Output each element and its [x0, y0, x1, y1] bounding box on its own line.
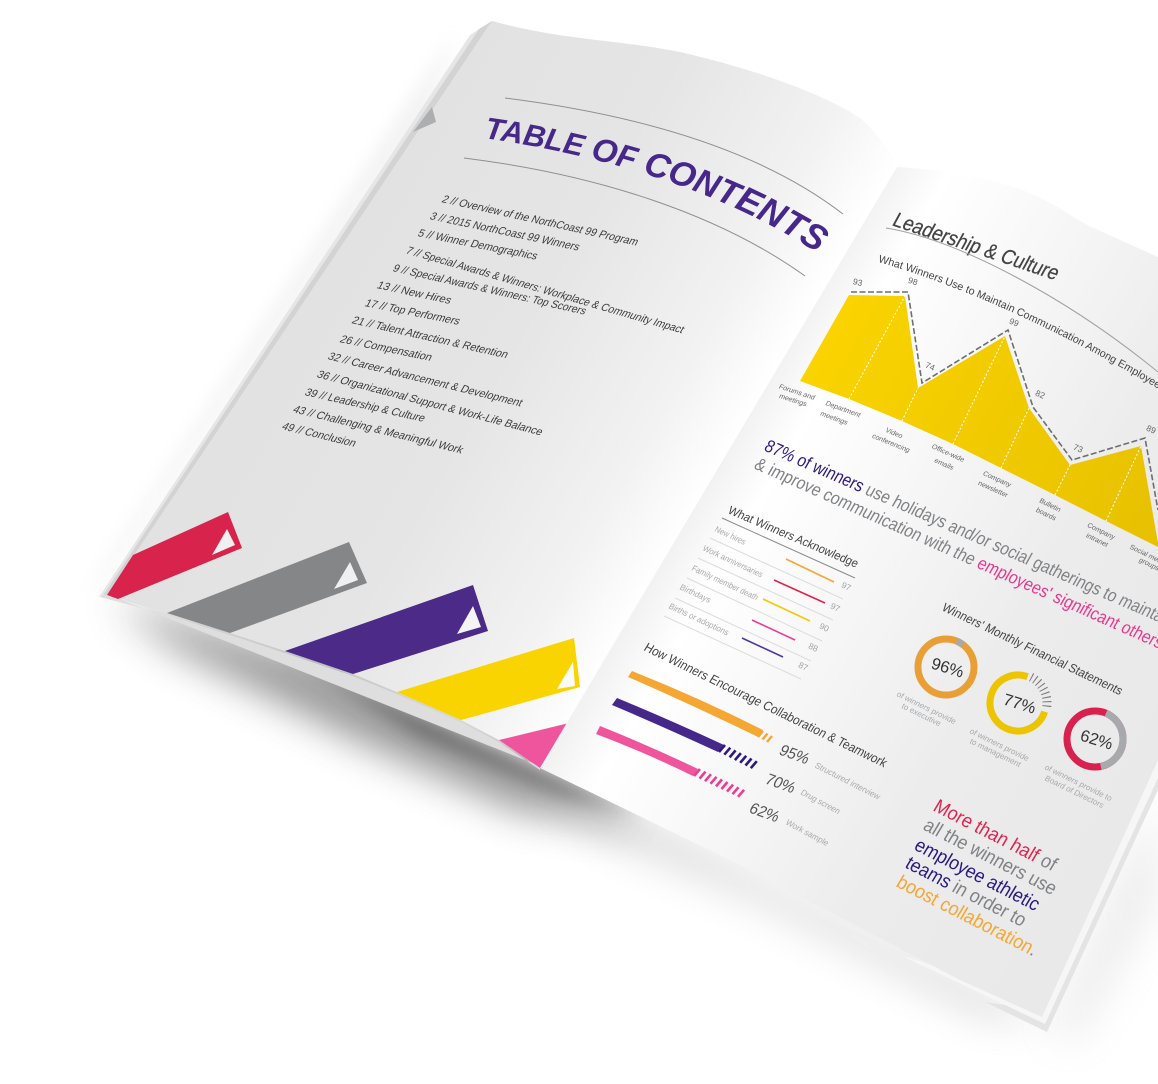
left page surface: [107, 21, 900, 768]
callout: employee athletic teams: [892, 795, 1062, 961]
axis labels: [777, 384, 1158, 573]
data values: [852, 275, 1158, 455]
title rule top: [505, 98, 843, 214]
donut: 96 percent: of winners provide: [895, 690, 958, 726]
text block: contents list: 32 // Career Advancement & Development: [325, 351, 526, 409]
values: 97: [840, 580, 853, 593]
text block: contents list: 9 // Special Awards & Winners: Top Scorers: [391, 263, 589, 317]
stripe: yellow: [397, 638, 580, 720]
row labels: Births or adoptions: [667, 601, 731, 637]
data values: 82: [1034, 388, 1047, 401]
stripe: grey: [167, 542, 367, 633]
bar labels: [784, 760, 883, 848]
data values: 73: [1072, 442, 1085, 455]
text block: contents list: 17 // Top Performers: [363, 298, 463, 328]
subheading: Winners' Monthly Financial Statements: [939, 601, 1125, 698]
axis labels: conferencing: [870, 433, 911, 454]
data values: 89: [1145, 423, 1158, 436]
white dotted dividers: [849, 296, 1141, 521]
text block: contents list: 13 // New Hires: [375, 280, 454, 307]
right page surface: [540, 167, 1158, 1017]
data values: 93: [852, 276, 864, 288]
area chart: [777, 275, 1158, 573]
data values: 74: [924, 360, 937, 373]
page edges: [900, 750, 1158, 1032]
stripe: purple: [285, 585, 488, 674]
percentages: 95%: [776, 742, 813, 768]
heading rule: [886, 228, 1158, 372]
title rule bottom: [464, 158, 805, 276]
row labels: Work anniversaries: [701, 543, 765, 579]
values: 87: [797, 660, 810, 673]
donut: 96 percent: [895, 630, 983, 728]
text block: contents list: 7 // Special Awards & Winners: Workplace & Community Impact: [403, 245, 687, 336]
axis labels: Video: [884, 427, 904, 440]
axis labels: Department: [824, 400, 862, 419]
text block: contents list: 26 // Compensation: [338, 334, 434, 364]
panel: winners' monthly financial statements: [895, 601, 1132, 810]
bar labels: Structured interview: [813, 760, 883, 802]
bar: drug screen: [612, 698, 757, 768]
values: [797, 580, 853, 673]
panel: what winners acknowledge: [664, 503, 861, 679]
bar: work sample: [596, 726, 744, 797]
values: 97: [829, 601, 842, 614]
text block: contents list: 49 // Conclusion: [279, 421, 358, 449]
donut: 96 percent: to executive: [900, 702, 943, 728]
callout: employee athletic teams: all the winners use: [919, 814, 1061, 900]
text block: contents list: 3 // 2015 NorthCoast 99 Winners: [428, 211, 582, 253]
subheading: How Winners Encourage Collaboration & Teamwork: [641, 640, 891, 770]
stripe: pink: [499, 723, 569, 768]
percentages: 70%: [762, 771, 799, 797]
axis labels: meetings: [819, 411, 849, 427]
bar labels: Work sample: [784, 817, 831, 848]
callout: employee athletic teams: More than half of: [929, 795, 1062, 876]
axis labels: intranet: [1084, 533, 1109, 549]
text block: contents list: 2 // Overview of the NorthCoast 99 Program: [440, 194, 641, 248]
donut: 62 percent: of winners provide to: [1043, 763, 1114, 803]
values: 90: [818, 621, 831, 634]
text block: contents list: 21 // Talent Attraction & Retention: [350, 315, 510, 361]
donut: 96 percent: 96%: [929, 655, 966, 682]
axis labels: Company: [981, 471, 1013, 489]
dashed line: [851, 292, 1158, 510]
stripe: red: [107, 512, 242, 599]
text block: contents list: 36 // Organizational Support & Work-Life Balance: [314, 369, 545, 438]
panel: left page (table of contents): [99, 21, 862, 770]
donut: 77 percent: [968, 664, 1057, 769]
percentages: [746, 742, 813, 826]
axis labels: newsletter: [976, 480, 1010, 499]
heading: leadership and culture: Leadership & Culture: [889, 209, 1064, 285]
bar: structured interview: [628, 671, 772, 742]
text block: contents list: 5 // Winner Demographics: [416, 228, 540, 262]
row dividers: [664, 538, 843, 679]
panel: right page (leadership and culture): [540, 167, 1158, 1032]
data values: 99: [1008, 316, 1021, 329]
values: 88: [807, 641, 820, 654]
row labels: [667, 524, 765, 637]
donut: 62 percent: [1043, 702, 1132, 810]
donut: 62 percent: Board of Directors: [1043, 774, 1106, 810]
text block: contents list: [279, 194, 687, 456]
percentages: 62%: [746, 800, 783, 826]
text block: contents list: 43 // Challenging & Meaningful Work: [290, 404, 466, 456]
page stack edges: [99, 21, 540, 770]
panel: how winners encourage collaboration: [596, 640, 891, 848]
donut: 77 percent: of winners provide: [968, 727, 1031, 763]
axis labels: Bulletin: [1038, 498, 1062, 514]
bar labels: Drug screen: [799, 787, 843, 816]
axis labels: boards: [1034, 507, 1058, 523]
axis labels: Company: [1086, 522, 1117, 541]
subheading rule: [722, 518, 855, 578]
yellow area: [800, 295, 1158, 547]
data values: 98: [907, 275, 919, 287]
donut: 77 percent: 77%: [1001, 691, 1038, 718]
callout: employee athletic teams: employee athletic: [910, 834, 1044, 916]
row labels: Birthdays: [678, 582, 713, 605]
value lines: [742, 559, 834, 657]
text block: contents list: 39 // Leadership & Culture: [303, 387, 427, 425]
axis labels: emails: [933, 458, 955, 472]
donut: 62 percent: 62%: [1078, 727, 1115, 754]
heading: table of contents: TABLE OF CONTENTS: [488, 118, 828, 249]
axis labels: Forums and: [777, 384, 816, 402]
axis labels: meetings: [778, 393, 808, 408]
row labels: Family member death: [690, 563, 761, 602]
row labels: New hires: [713, 524, 748, 547]
donut: 77 percent: to management: [968, 737, 1023, 769]
callout: employee athletic teams: boost collaboration.: [892, 871, 1042, 961]
colour tag: grey corner triangle: [413, 107, 436, 132]
callout: employee athletic teams: teams in order to: [901, 852, 1030, 931]
subheading: What Winners Acknowledge: [726, 503, 861, 570]
axis labels: Office-wide: [930, 444, 965, 464]
